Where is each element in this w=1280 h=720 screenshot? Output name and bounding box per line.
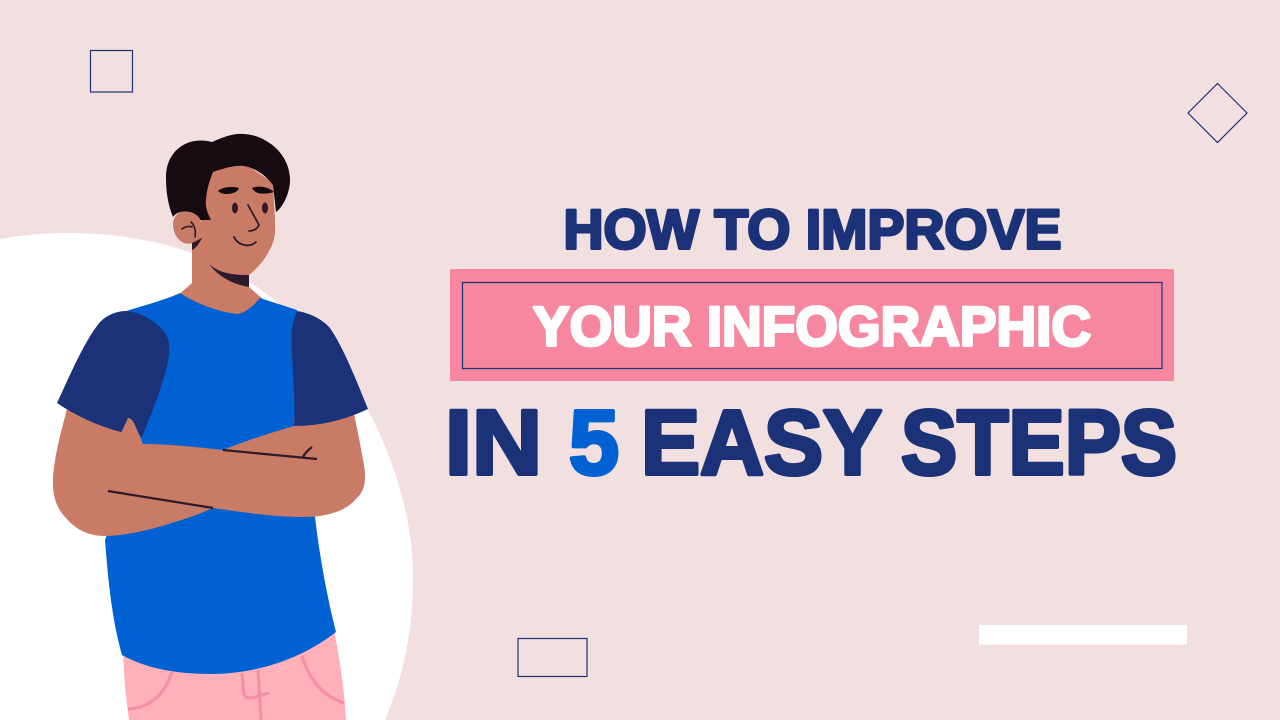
- left sleeve: [57, 311, 169, 437]
- word: in: IN: [445, 392, 542, 494]
- neck and face: [176, 160, 275, 318]
- pink banner: [450, 269, 1174, 381]
- banner inner outline: [462, 282, 1162, 368]
- word: steps: STEPS: [901, 392, 1177, 494]
- banner fill: [450, 269, 1174, 381]
- decorative diamond outline: [1188, 84, 1247, 142]
- thumb: [121, 418, 143, 448]
- character illustration: [53, 134, 368, 720]
- crossed arms: [53, 398, 365, 536]
- decorative square outline: [90, 50, 132, 92]
- hair: [166, 134, 290, 220]
- title line: how to improve: HOW TO IMPROVE: [564, 198, 1062, 260]
- word: easy: EASY: [641, 392, 882, 494]
- face features: [218, 187, 274, 245]
- title line: in 5 easy steps: [445, 392, 1177, 494]
- banner text: YOUR INFOGRAPHIC: [533, 294, 1091, 358]
- ear: [173, 210, 202, 250]
- decorative rectangle outline: [518, 638, 587, 676]
- decorative white bar: [979, 625, 1187, 644]
- white blob behind character: [0, 233, 413, 720]
- number 5: 5: [569, 392, 619, 494]
- right sleeve: [292, 311, 368, 426]
- blue t-shirt body: [105, 293, 336, 674]
- pants: [123, 625, 346, 720]
